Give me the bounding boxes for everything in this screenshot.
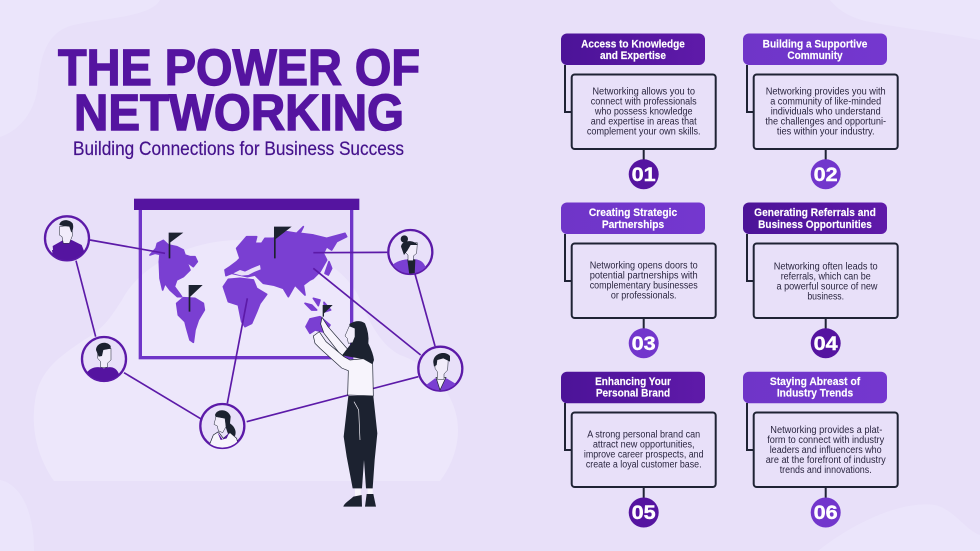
card 04 heading	[754, 207, 876, 231]
card 03 heading: Creating Strategic	[589, 207, 677, 219]
card 04 heading: Business Opportunities	[758, 219, 872, 231]
avatar: man in suit	[418, 347, 462, 393]
card 03 number badge: 03	[632, 333, 656, 355]
infographic canvas	[44, 34, 899, 528]
card 06 heading	[770, 376, 861, 400]
card 02 body text	[765, 87, 886, 137]
card 04 body text	[774, 261, 878, 302]
card 05 header	[561, 372, 705, 403]
card 01 body text: who possess knowledge	[594, 106, 693, 117]
subtitle: Building Connections for Business Success	[73, 139, 404, 160]
title: THE POWER OF	[58, 39, 420, 96]
card 02 body box	[754, 74, 898, 149]
card 03 body text	[590, 261, 698, 302]
card 01: Access to Knowledge and Expertise	[561, 34, 716, 189]
card 06 connector	[747, 403, 826, 498]
card 04 body text: Networking often leads to	[774, 261, 878, 272]
illustration: network around world map	[45, 199, 462, 507]
card 03 heading: Partnerships	[602, 219, 664, 231]
card 02 heading: Community	[787, 50, 843, 62]
background blob: top left	[0, 0, 160, 137]
card 06: Staying Abreast of Industry Trends	[743, 372, 898, 528]
card 03 body text: potential partnerships with	[590, 271, 698, 282]
card 05 heading: Personal Brand	[596, 388, 670, 400]
card 03 header	[561, 202, 705, 234]
card 03 heading	[589, 207, 677, 231]
card 01 number badge: 01	[632, 164, 656, 186]
avatar: man with laptop	[45, 216, 89, 262]
card 01 connector	[565, 65, 644, 160]
avatar: woman with bun	[388, 230, 432, 275]
card 05 number badge: 05	[632, 502, 656, 524]
card 04 number badge	[811, 328, 841, 358]
card 02 connector	[747, 65, 826, 160]
card 05 body box	[572, 412, 716, 487]
card 06 body text: Networking provides a plat-	[770, 425, 882, 436]
card 04 body box	[754, 244, 898, 318]
background blob: bottom right	[818, 504, 980, 551]
card 04 body text: referrals, which can be	[781, 271, 871, 282]
card 03 body box	[572, 244, 716, 318]
card 06 body text	[766, 425, 886, 476]
woman pinning the map	[313, 317, 377, 507]
card 01 body text: Networking allows you to	[592, 87, 696, 98]
card 02 body text: individuals who understand	[771, 106, 881, 117]
avatar: man in purple sweater	[82, 337, 126, 383]
card 06 header	[743, 372, 887, 403]
card 02 heading	[763, 38, 867, 62]
card 02 heading: Building a Supportive	[763, 38, 867, 50]
card 05 body text	[584, 429, 704, 470]
card 01 body text: and expertise in areas that	[591, 116, 697, 127]
card 01 body text: complement your own skills.	[587, 126, 701, 137]
card 06 body box	[754, 412, 898, 487]
card 06 number badge: 06	[814, 502, 838, 524]
card 03: Creating Strategic Partnerships	[561, 202, 716, 358]
card 03 number badge	[629, 328, 659, 358]
card 01 heading	[581, 38, 685, 62]
card 02 body text: Networking provides you with	[766, 87, 886, 98]
card 05 heading: Enhancing Your	[595, 376, 672, 388]
card 05 heading	[595, 376, 672, 400]
card 06 body text: are at the forefront of industry	[766, 455, 886, 466]
card 04 body text: a powerful source of new	[776, 281, 878, 292]
card 04 number badge: 04	[814, 333, 838, 355]
card 01 heading: Access to Knowledge	[581, 38, 685, 50]
title	[58, 39, 420, 141]
card 02 body text: a community of like-minded	[770, 96, 881, 108]
presentation board	[134, 199, 359, 358]
card 02 body text: the challenges and opportuni-	[765, 116, 886, 127]
card 05 body text: attract new opportunities,	[593, 439, 695, 450]
card 06 heading: Industry Trends	[777, 388, 853, 400]
card 04 header	[743, 202, 887, 234]
card 03 body text: Networking opens doors to	[590, 261, 698, 272]
card 03 body text: complementary businesses	[590, 280, 698, 292]
card 06 number badge	[811, 498, 841, 528]
card 01 body box	[572, 74, 716, 149]
title: NETWORKING	[74, 84, 404, 141]
card 06 body text: trends and innovations.	[780, 465, 872, 476]
background blob: bottom left	[0, 480, 34, 551]
card 02 header	[743, 34, 887, 65]
connection lines	[76, 240, 435, 422]
card 01 heading: and Expertise	[600, 50, 666, 62]
card 03 connector	[565, 234, 644, 329]
card 02 number badge	[811, 159, 841, 189]
background blob: top right	[830, 0, 980, 40]
map flags	[169, 227, 333, 317]
card 05 number badge	[629, 498, 659, 528]
card 01 body text: connect with professionals	[591, 96, 697, 108]
card 06 heading: Staying Abreast of	[770, 376, 861, 388]
card 02: Building a Supportive Community	[743, 34, 898, 189]
card 02 number badge: 02	[814, 164, 838, 186]
card 05 body text: A strong personal brand can	[587, 429, 700, 440]
card 04 connector	[747, 234, 826, 329]
avatar: woman with ponytail	[200, 404, 244, 450]
card 04 body text: business.	[807, 291, 844, 302]
world map	[150, 227, 347, 342]
card 05: Enhancing Your Personal Brand	[561, 372, 716, 528]
card 02 body text: ties within your industry.	[777, 126, 875, 137]
card 04: Generating Referrals and Business Opportunities	[743, 202, 898, 358]
card 03 body text: or professionals.	[611, 290, 677, 302]
card 01 body text	[587, 87, 701, 137]
card 05 body text: improve career prospects, and	[584, 449, 704, 460]
card 01 number badge	[629, 159, 659, 189]
card 05 body text: create a loyal customer base.	[586, 459, 702, 470]
background cloud behind illustration	[34, 240, 458, 481]
card 01 header	[561, 34, 705, 65]
card 06 body text: form to connect with industry	[767, 435, 884, 446]
card 06 body text: leaders and influencers who	[770, 445, 882, 456]
card 04 heading: Generating Referrals and	[754, 207, 876, 219]
card 05 connector	[565, 403, 644, 498]
